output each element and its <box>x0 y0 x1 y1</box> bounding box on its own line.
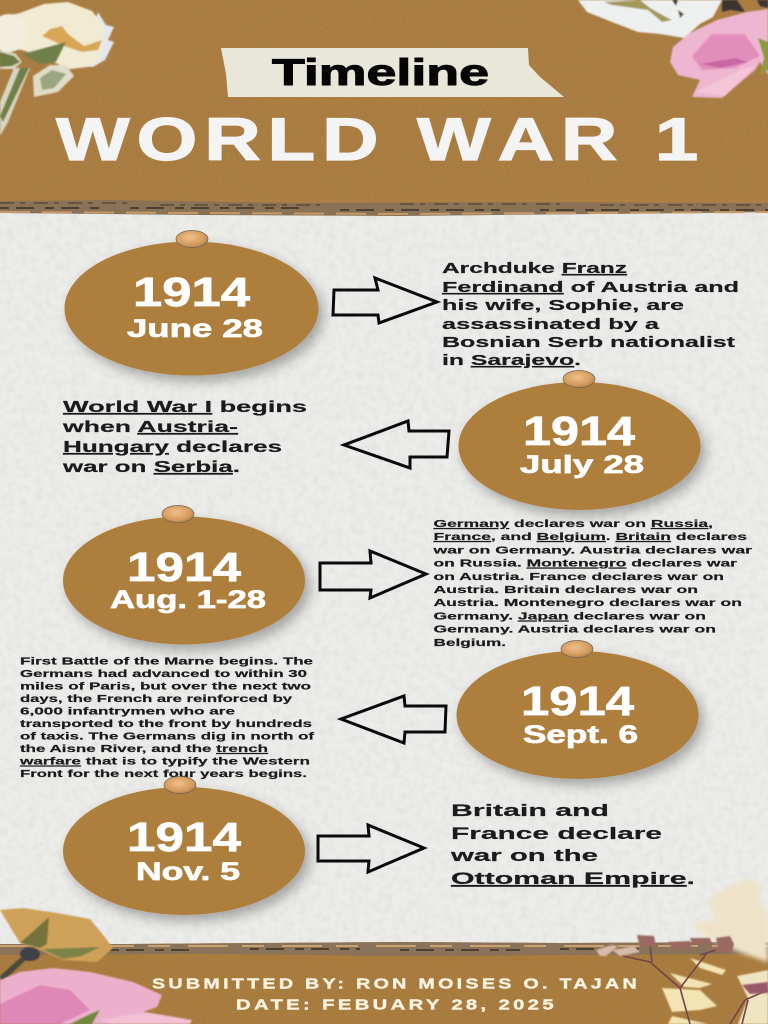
arrow 3 <box>320 551 426 598</box>
text: Battle of the Marne <box>18 656 315 780</box>
text: declarations of war: Belgium. <box>434 637 506 649</box>
text: Ottoman Empire: war on the <box>449 846 598 865</box>
timeline entry 3: Aug. 1-28 <box>63 506 752 649</box>
icon: pink peony bottom left <box>0 968 192 1024</box>
text: Battle of the Marne: Germans had advanced to within 30 <box>20 669 308 680</box>
text: Battle of the Marne: warfare that is to typify the Western <box>18 756 310 768</box>
date badge 2: 1914 <box>523 408 635 454</box>
text: war begins: Hungary declares <box>63 439 282 456</box>
cream right leaves <box>737 970 768 1024</box>
date badge 5 <box>63 776 305 915</box>
arrow 4 <box>341 696 446 743</box>
twig stems <box>623 946 768 1024</box>
text: Battle of the Marne: Front for the next four years begins. <box>20 769 307 780</box>
text: Ottoman Empire <box>449 801 695 888</box>
text: war begins: World War I begins <box>63 399 307 416</box>
timeline entry 4: Sept. 6 <box>18 640 699 780</box>
top cardboard header band <box>0 0 768 216</box>
text: war begins <box>61 399 307 476</box>
date badge 1: 1914 <box>133 269 250 315</box>
text: Ottoman Empire: France declare <box>451 824 662 843</box>
text: war begins: when Austria- <box>61 419 238 436</box>
text: Battle of the Marne: the Aisne River, and the trench <box>20 744 268 755</box>
icon: dried yellow rose bottom left <box>0 908 113 982</box>
timeline entry 2: July 28 <box>61 370 700 510</box>
text: war begins: war on Serbia . <box>61 459 240 476</box>
text: declarations of war: Germany declares war on Russia , <box>434 518 713 530</box>
date badge 5: Nov. 5 <box>136 858 240 886</box>
date badge 3 <box>63 506 305 644</box>
date badge 2 <box>458 370 700 510</box>
date badge 1 <box>64 230 318 376</box>
text: declarations of war: Austria. Montenegro declares war on <box>434 597 742 609</box>
text: assassination: his wife, Sophie, are <box>442 298 684 314</box>
date badge 2: July 28 <box>520 451 644 479</box>
main title: WORLD WAR 1 <box>56 106 698 173</box>
timeline entry 5: Nov. 5 <box>63 776 695 915</box>
date badge 3: Aug. 1-28 <box>110 586 266 614</box>
text: declarations of war: war on Germany. Austria declares war <box>432 544 752 556</box>
timeline entry 1: June 28 <box>64 230 739 376</box>
icon: cream rose top left <box>0 2 114 136</box>
text: assassination: Archduke Franz <box>442 261 627 277</box>
footer credits: SUBMITTED BY: RON MOISES O. TAJAN <box>152 976 640 992</box>
icon: white blossoms and pink peony top right <box>578 0 768 98</box>
text: Battle of the Marne: First Battle of the Marne begins. The <box>20 656 314 668</box>
text: declarations of war: Germany. Austria declares war on <box>434 624 716 636</box>
heading: Timeline: Timeline <box>272 52 489 93</box>
bottom cardboard footer band <box>0 942 768 1024</box>
text: Battle of the Marne: 6,000 infantrymen who are <box>20 706 236 718</box>
text: assassination: Ferdinand of Austria and <box>442 280 739 296</box>
pale plume <box>692 878 768 962</box>
text: declarations of war: on Russia. Montenegro declares war <box>434 558 737 570</box>
text: assassination: Bosnian Serb nationalist <box>442 335 735 351</box>
text: assassination: assassinated by a <box>442 317 661 333</box>
arrow 1 <box>333 278 437 323</box>
text: declarations of war: Austria. Britain declares war on <box>434 584 698 596</box>
text: Battle of the Marne: transported to the front by hundreds <box>20 719 313 730</box>
date badge 4: Sept. 6 <box>523 721 638 749</box>
tape banner with Timeline heading <box>221 48 564 97</box>
text: declarations of war: Germany. Japan declares war on <box>434 610 706 622</box>
icon: pale leaves and mauve twigs bottom right <box>596 878 768 1024</box>
text: Battle of the Marne: miles of Paris, but over the next two <box>20 682 311 692</box>
date badge 4: 1914 <box>521 678 634 724</box>
arrow 5 <box>318 825 424 872</box>
arrow 2 <box>344 421 449 468</box>
cream leaves <box>662 958 726 1024</box>
text: assassination: in Sarajevo . <box>442 353 581 369</box>
text: Ottoman Empire: Ottoman Empire . <box>451 869 695 888</box>
text: Battle of the Marne: days, the French are reinforced by <box>20 694 293 705</box>
text: declarations of war: on Austria. France declares war on <box>434 571 724 583</box>
text: Ottoman Empire: Britain and <box>451 801 609 820</box>
date badge 1: June 28 <box>127 315 263 343</box>
date badge 4 <box>456 640 698 779</box>
paper background <box>0 205 768 955</box>
text: assassination <box>442 261 739 369</box>
footer credits: DATE: FEBUARY 28, 2025 <box>236 996 557 1014</box>
text: declarations of war <box>432 518 752 649</box>
footer credits <box>152 976 640 1014</box>
date badge 5: 1914 <box>127 814 241 860</box>
twig buds <box>637 935 734 953</box>
text: declarations of war: France , and Belgium . Britain declares <box>434 531 747 543</box>
text: Battle of the Marne: of taxis. The Germans dig in north of <box>20 732 315 742</box>
date badge 3: 1914 <box>127 544 241 590</box>
